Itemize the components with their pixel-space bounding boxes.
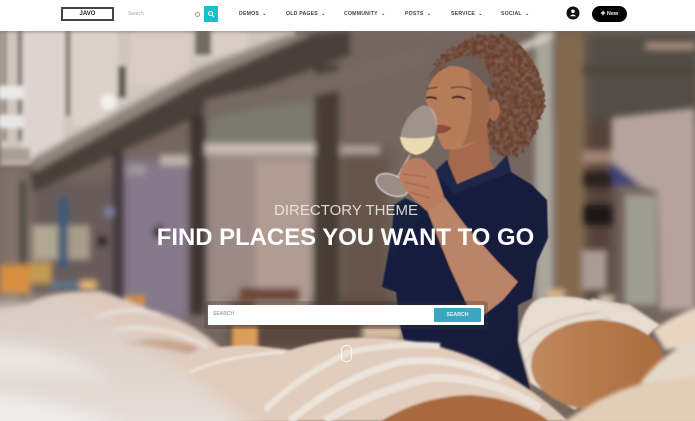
hero title: FIND PLACES YOU WANT TO GO xyxy=(157,224,534,251)
menu: service: SERVICE ⌄ xyxy=(451,11,483,17)
hero subtitle: DIRECTORY THEME xyxy=(274,202,418,219)
eyes xyxy=(426,97,465,99)
search button: SEARCH xyxy=(447,312,468,318)
woman's body xyxy=(372,56,548,390)
warehouse upper left windows xyxy=(0,31,295,165)
face xyxy=(425,63,490,150)
new button: ✚ New xyxy=(601,11,618,17)
eyebrows xyxy=(427,87,472,90)
search placeholder: Search xyxy=(128,11,144,17)
menu: posts: POSTS ⌄ xyxy=(405,11,431,17)
far barrels left xyxy=(0,291,300,421)
logo xyxy=(61,7,114,21)
shirt xyxy=(382,155,548,390)
new button xyxy=(592,6,627,22)
wine glass foot xyxy=(372,169,412,201)
menu: social: SOCIAL ⌄ xyxy=(501,11,530,17)
far right barrels xyxy=(560,306,695,421)
header search button xyxy=(204,6,218,22)
settings icon xyxy=(195,12,200,17)
logo: JAVO xyxy=(80,11,95,17)
right barrel xyxy=(518,296,665,410)
center barrel xyxy=(165,338,568,421)
lips xyxy=(436,125,452,133)
menu: demos: DEMOS ⌄ xyxy=(239,11,267,17)
wine xyxy=(400,136,435,155)
wine glass bowl xyxy=(400,105,437,155)
hand xyxy=(399,158,445,212)
hair band over forehead xyxy=(428,56,492,90)
wine glass stem xyxy=(398,155,410,176)
left foreground barrel xyxy=(0,300,270,421)
icon: scroll mouse xyxy=(341,345,352,362)
menu: community: COMMUNITY ⌄ xyxy=(344,11,386,17)
search button xyxy=(434,308,481,322)
header search box xyxy=(120,6,204,22)
collar xyxy=(435,155,511,194)
top navigation bar xyxy=(0,0,695,31)
woman's hair xyxy=(430,33,545,157)
hero search bar xyxy=(208,305,484,325)
icon: user avatar xyxy=(566,6,580,20)
arm xyxy=(427,198,518,318)
ear xyxy=(488,99,500,121)
neck xyxy=(448,125,496,192)
right side xyxy=(535,31,553,301)
warehouse beams and columns xyxy=(0,31,695,340)
menu: old pages: OLD PAGES ⌄ xyxy=(286,11,326,17)
search placeholder: SEARCH xyxy=(213,311,234,317)
